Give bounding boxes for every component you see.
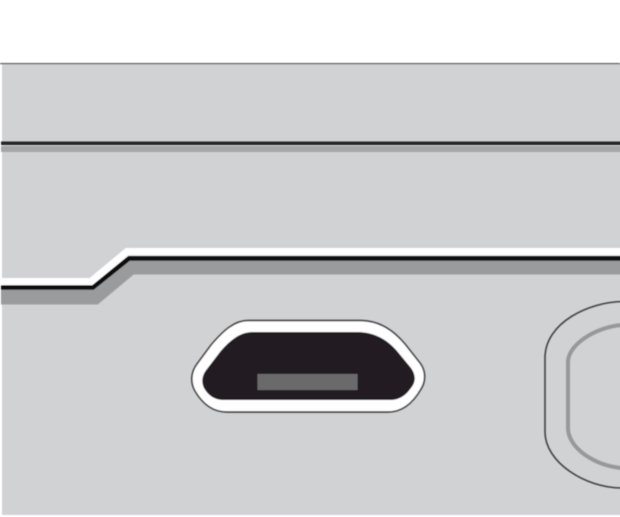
seam line: stepped groove	[1, 252, 620, 297]
button outer outline	[545, 302, 620, 488]
port opening	[202, 332, 415, 400]
button inner outline	[568, 325, 620, 468]
port contact bar	[258, 374, 358, 390]
icon: micro USB connector port	[192, 320, 425, 412]
icon: recessed button outline	[545, 302, 620, 488]
port outer rim	[192, 320, 425, 412]
seam line: upper straight groove	[1, 142, 620, 152]
